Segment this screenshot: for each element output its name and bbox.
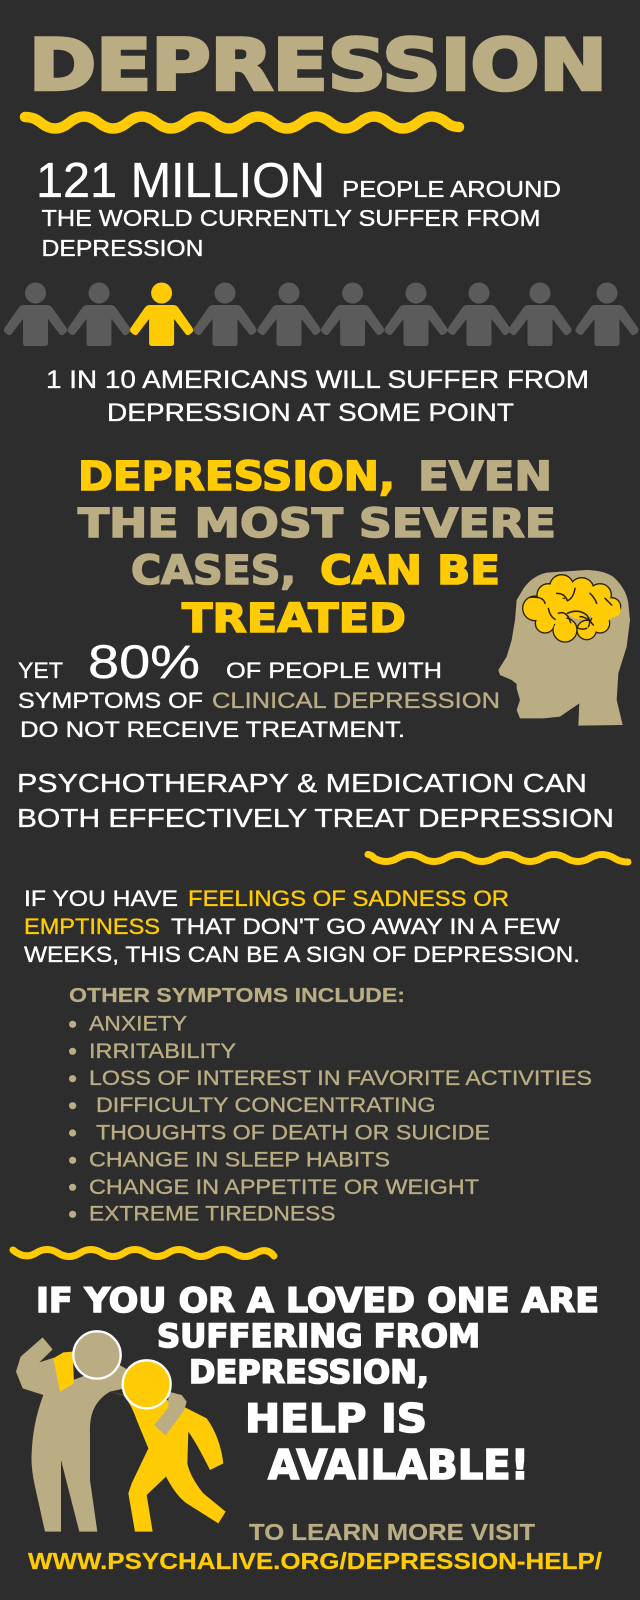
- text block: 80 percent: [18, 635, 500, 742]
- wavy divider: middle: [368, 854, 628, 862]
- text block: 121 million: THE WORLD CURRENTLY SUFFER FROM: [42, 205, 540, 231]
- heading: depression can be treated: CAN BE: [320, 548, 500, 594]
- text block: 121 million: 121 MILLION: [36, 154, 325, 208]
- list: symptoms: EXTREME TIREDNESS: [89, 1202, 336, 1226]
- text block: 80 percent: CLINICAL DEPRESSION: [212, 688, 500, 713]
- heading: help is available: HELP IS: [245, 1397, 427, 1442]
- heading: depression can be treated: THE MOST SEVERE: [78, 501, 556, 547]
- heading: depression can be treated: TREATED: [182, 596, 406, 642]
- text block: 80 percent: YET: [18, 658, 63, 683]
- text block: 80 percent: 80%: [88, 635, 200, 688]
- text block: psychotherapy and medication: PSYCHOTHERAPY & MEDICATION CAN: [17, 768, 587, 798]
- heading: help is available: AVAILABLE!: [268, 1441, 529, 1489]
- heading: depression can be treated: CASES,: [131, 548, 296, 594]
- call to action: learn more: TO LEARN MORE VISIT: [249, 1519, 535, 1545]
- text block: psychotherapy and medication: BOTH EFFECTIVELY TREAT DEPRESSION: [17, 803, 614, 833]
- heading: depression can be treated: EVEN: [418, 454, 552, 500]
- call to action: url: WWW.PSYCHALIVE.ORG/DEPRESSION-HELP/: [28, 1548, 603, 1574]
- text block: feelings of sadness: FEELINGS OF SADNESS OR: [188, 886, 509, 911]
- title: DEPRESSION: [29, 24, 607, 106]
- text block: psychotherapy and medication: [17, 768, 614, 833]
- text block: 80 percent: OF PEOPLE WITH: [226, 658, 442, 683]
- text block: 1 in 10 americans: [46, 366, 589, 427]
- list: symptoms: CHANGE IN APPETITE OR WEIGHT: [89, 1175, 479, 1199]
- text block: feelings of sadness: THAT DON'T GO AWAY IN A FEW: [171, 914, 560, 939]
- text block: 80 percent: DO NOT RECEIVE TREATMENT.: [20, 717, 405, 742]
- heading: help is available: SUFFERING FROM: [157, 1317, 480, 1355]
- list: symptoms: [69, 1012, 592, 1226]
- heading: depression can be treated: DEPRESSION,: [78, 454, 395, 500]
- illustration: one person supporting another: [16, 1331, 226, 1532]
- heading: help is available: DEPRESSION,: [189, 1353, 429, 1391]
- text block: feelings of sadness: WEEKS, THIS CAN BE A SIGN OF DEPRESSION.: [24, 942, 580, 967]
- text block: 1 in 10 americans: 1 IN 10 AMERICANS WILL SUFFER FROM: [46, 366, 589, 394]
- text block: feelings of sadness: EMPTINESS: [24, 914, 160, 939]
- text block: feelings of sadness: [24, 886, 580, 967]
- list: symptoms: ANXIETY: [89, 1012, 187, 1036]
- icon row: ten people, one highlighted: [4, 282, 639, 346]
- heading: help is available: IF YOU OR A LOVED ONE ARE: [36, 1281, 599, 1321]
- wavy divider: bottom: [13, 1250, 274, 1256]
- list: symptoms: THOUGHTS OF DEATH OR SUICIDE: [96, 1120, 490, 1144]
- list: symptoms: CHANGE IN SLEEP HABITS: [89, 1148, 390, 1172]
- text block: feelings of sadness: IF YOU HAVE: [24, 886, 178, 911]
- list: symptoms: DIFFICULTY CONCENTRATING: [96, 1093, 435, 1117]
- icon: head with brain: [498, 570, 630, 726]
- heading: help is available: [36, 1281, 599, 1489]
- heading: depression can be treated: [78, 454, 556, 642]
- list: symptoms: LOSS OF INTEREST IN FAVORITE ACTIVITIES: [89, 1066, 592, 1090]
- text block: 121 million: PEOPLE AROUND: [342, 176, 561, 202]
- text block: 80 percent: SYMPTOMS OF: [18, 688, 203, 713]
- text block: 1 in 10 americans: DEPRESSION AT SOME POINT: [107, 399, 514, 427]
- text block: 121 million: [36, 154, 561, 261]
- wavy divider: top: [25, 116, 459, 128]
- list: symptoms: IRRITABILITY: [89, 1039, 236, 1063]
- heading: other symptoms: OTHER SYMPTOMS INCLUDE:: [69, 985, 405, 1007]
- text block: 121 million: DEPRESSION: [42, 235, 204, 261]
